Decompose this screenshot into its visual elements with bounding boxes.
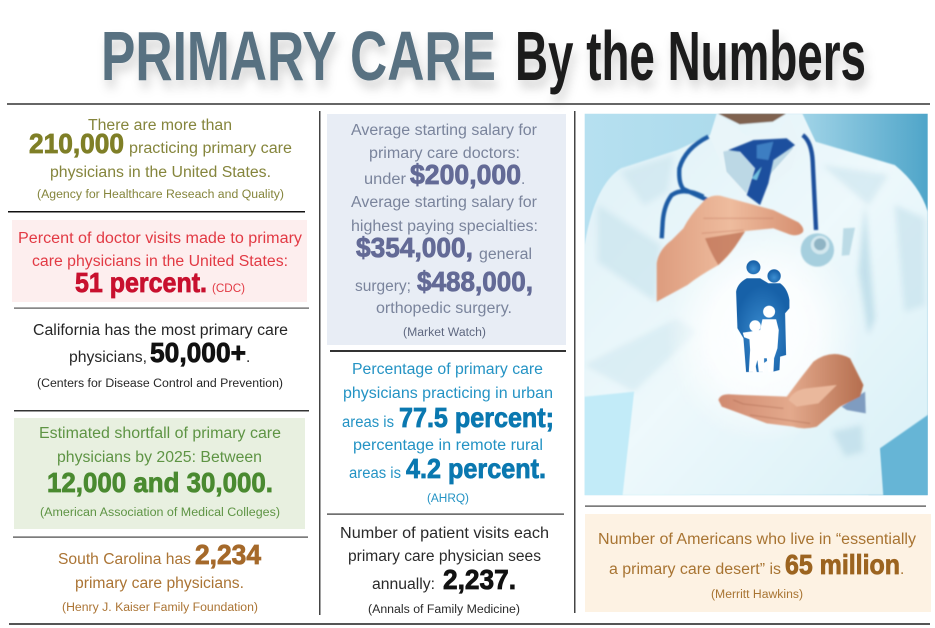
title: PRIMARY CARE xyxy=(101,17,496,95)
panel: doctor visits 51 percent: care physicians in the United States: xyxy=(32,253,288,270)
panel: starting salaries: (Market Watch) xyxy=(403,327,486,339)
stat: patient visits 2,237: primary care physician sees xyxy=(348,548,541,565)
panel: starting salaries: . xyxy=(521,171,525,188)
panel: starting salaries: orthopedic surgery. xyxy=(376,300,512,317)
panel: shortfall 12,000 and 30,000: physicians by 2025: Between xyxy=(57,449,262,466)
stat: South Carolina 2,234: primary care physicians. xyxy=(75,575,244,592)
panel: starting salaries: $488,000, xyxy=(417,266,533,297)
stat: South Carolina 2,234: 2,234 xyxy=(195,539,261,570)
panel: primary care desert 65 million: Number of Americans who live in “essentially xyxy=(598,531,916,548)
stat: 210,000 physicians: physicians in the United States. xyxy=(50,164,271,181)
panel: shortfall 12,000 and 30,000: 12,000 and 30,000. xyxy=(47,467,273,498)
stat: urban and rural percentages: areas is xyxy=(349,465,401,482)
stat: patient visits 2,237 xyxy=(340,525,549,616)
panel: primary care desert 65 million xyxy=(585,514,931,612)
stat: California 50,000+ xyxy=(33,322,288,390)
panel: starting salaries: Average starting salary for xyxy=(351,194,537,211)
stat: California 50,000+: (Centers for Disease Control and Prevention) xyxy=(37,378,283,390)
stat: urban and rural percentages: physicians practicing in urban xyxy=(343,385,553,402)
stethoscope xyxy=(662,137,708,238)
coat xyxy=(585,114,928,495)
panel: primary care desert 65 million: . xyxy=(900,561,904,578)
stat: urban and rural percentages: percentage in remote rural xyxy=(353,437,543,454)
stethoscope chest piece xyxy=(801,233,834,267)
neck and collar xyxy=(718,114,786,124)
stat: patient visits 2,237: Number of patient visits each xyxy=(340,525,549,542)
panel: doctor visits 51 percent: Percent of doctor visits made to primary xyxy=(18,230,302,247)
stat: South Carolina 2,234 xyxy=(58,539,261,614)
stat: patient visits 2,237: (Annals of Family Medicine) xyxy=(368,604,520,616)
stat: 210,000 physicians xyxy=(29,117,292,201)
stat: urban and rural percentages xyxy=(342,361,554,505)
panel: starting salaries: surgery; xyxy=(355,278,411,295)
stat: South Carolina 2,234: South Carolina has xyxy=(58,551,191,568)
upper hand xyxy=(657,195,803,302)
panel: starting salaries: highest paying specialties: xyxy=(351,218,538,235)
family silhouette xyxy=(736,260,789,372)
stat: urban and rural percentages: (AHRQ) xyxy=(427,493,469,505)
panel: starting salaries: Average starting salary for xyxy=(351,122,537,139)
stat: urban and rural percentages: 77.5 percent; xyxy=(399,402,554,433)
panel: primary care desert 65 million: (Merritt Hawkins) xyxy=(711,589,803,601)
stat: California 50,000+: . xyxy=(246,349,250,366)
stat: 210,000 physicians: There are more than xyxy=(88,117,232,134)
stat: 210,000 physicians: 210,000 xyxy=(29,128,124,159)
panel: doctor visits 51 percent: (CDC) xyxy=(212,283,245,295)
panel: starting salaries: general xyxy=(479,246,532,263)
stat: California 50,000+: California has the most primary care xyxy=(33,322,288,339)
photo: doctor protecting family xyxy=(585,114,928,495)
stat: 210,000 physicians: practicing primary care xyxy=(129,140,292,157)
stat: patient visits 2,237: 2,237. xyxy=(443,564,516,595)
stat: urban and rural percentages: areas is xyxy=(342,414,394,431)
panel: starting salaries: $200,000 xyxy=(410,159,521,190)
stat: California 50,000+: physicians, xyxy=(69,349,147,366)
stat: patient visits 2,237: annually: xyxy=(372,576,435,593)
panel: starting salaries: under xyxy=(364,171,406,188)
panel: shortfall 12,000 and 30,000 xyxy=(14,418,305,529)
shirt cuff xyxy=(842,392,866,413)
stat: urban and rural percentages: 4.2 percent. xyxy=(406,453,546,484)
panel: doctor visits 51 percent: 51 percent. xyxy=(75,267,207,298)
panel: starting salaries: $354,000, xyxy=(356,232,473,263)
coat folds xyxy=(585,155,924,457)
stat: 210,000 physicians: (Agency for Healthcare Reseach and Quality) xyxy=(37,189,284,201)
panel: starting salaries: primary care doctors: xyxy=(369,145,520,162)
panel: shortfall 12,000 and 30,000: (American Association of Medical Colleges) xyxy=(40,507,280,519)
stat: South Carolina 2,234: (Henry J. Kaiser Family Foundation) xyxy=(62,602,258,614)
lower hand xyxy=(718,354,863,428)
tie xyxy=(728,138,795,205)
panel: doctor visits 51 percent xyxy=(12,220,307,302)
stat: urban and rural percentages: Percentage of primary care xyxy=(352,361,543,378)
panel: primary care desert 65 million: a primary care desert” is xyxy=(609,561,781,578)
panel: shortfall 12,000 and 30,000: Estimated shortfall of primary care xyxy=(39,425,281,442)
stat: California 50,000+: 50,000+ xyxy=(150,337,246,368)
panel: primary care desert 65 million: 65 million xyxy=(785,549,900,580)
panel: starting salaries xyxy=(327,114,566,345)
